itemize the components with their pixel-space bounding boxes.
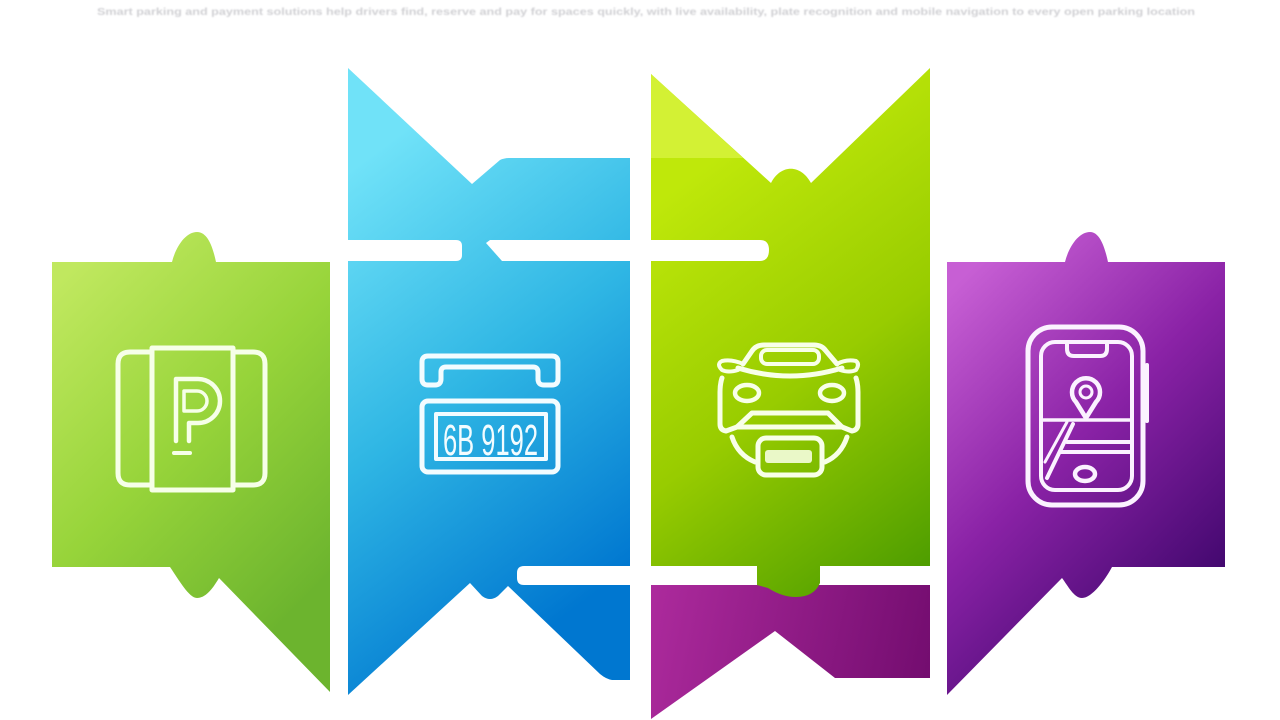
panel: ticket meter (blue): [348, 68, 630, 695]
icon: car front: [719, 345, 858, 475]
panel shape: lime green: [651, 68, 930, 597]
divider bar: upper left: [348, 240, 462, 261]
panel: parking (green): [52, 232, 330, 692]
divider bar: right lower: [820, 566, 930, 585]
panel shape: blue: [348, 68, 630, 695]
icon: phone with map pin: [1028, 327, 1147, 505]
faint header caption: Smart parking and payment solutions help drivers find, reserve and pay for spaces quickly, with live availability, plate recognition and mobile navigation to every open parking location: [97, 7, 1195, 18]
panel shape: green: [52, 232, 330, 692]
divider bar: upper right: [486, 240, 630, 261]
panel shape: purple: [947, 232, 1225, 695]
divider bar: upper: [651, 240, 769, 261]
highlight: top triangle: [651, 74, 743, 158]
divider bar: left lower: [651, 566, 757, 585]
display number: 6B 9192: [443, 416, 538, 465]
panel: mobile map (purple): [947, 232, 1225, 695]
icon: ticket display: [422, 356, 558, 472]
divider bar: lower: [517, 566, 630, 585]
panel shape: purple lower: [651, 585, 930, 719]
icon: parking sign: [118, 348, 265, 490]
panel: car (lime green and purple): [651, 68, 930, 719]
